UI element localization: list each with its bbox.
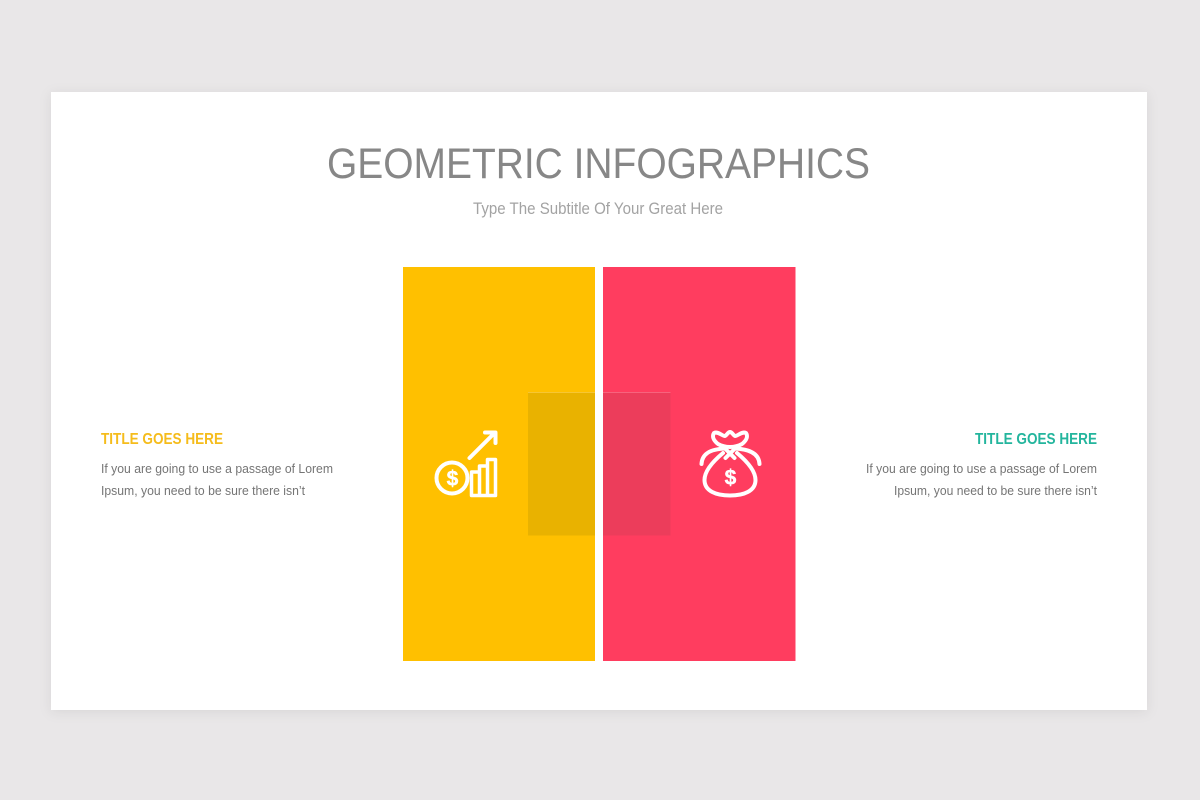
icon: coin with growth chart and arrow: $ [447,468,459,490]
overlap: red half [603,392,670,536]
icon: coin with growth chart and arrow [436,432,496,496]
left body line 1: If you are going to use a passage of Lorem [101,462,333,476]
subtitle: Type The Subtitle Of Your Great Here [473,200,723,218]
left heading: TITLE GOES HERE [101,431,223,448]
overlap: yellow half [528,392,595,536]
icon: money bag [702,432,760,496]
overlap: top highlight, red side [603,392,670,393]
right body line 1: If you are going to use a passage of Lorem [866,462,1097,476]
panel: yellow rectangle [403,267,595,661]
right body line 2: Ipsum, you need to be sure there isn’t [894,484,1098,498]
title: GEOMETRIC INFOGRAPHICS [327,140,870,188]
panel: slide card [51,92,1147,710]
right heading: TITLE GOES HERE [975,431,1097,448]
left body line 2: Ipsum, you need to be sure there isn’t [101,484,306,498]
icon: money bag: $ [725,466,737,490]
right text block [866,431,1098,498]
left text block [101,431,333,498]
panel: red rectangle [603,267,796,661]
overlap: top highlight, yellow side [528,392,595,393]
